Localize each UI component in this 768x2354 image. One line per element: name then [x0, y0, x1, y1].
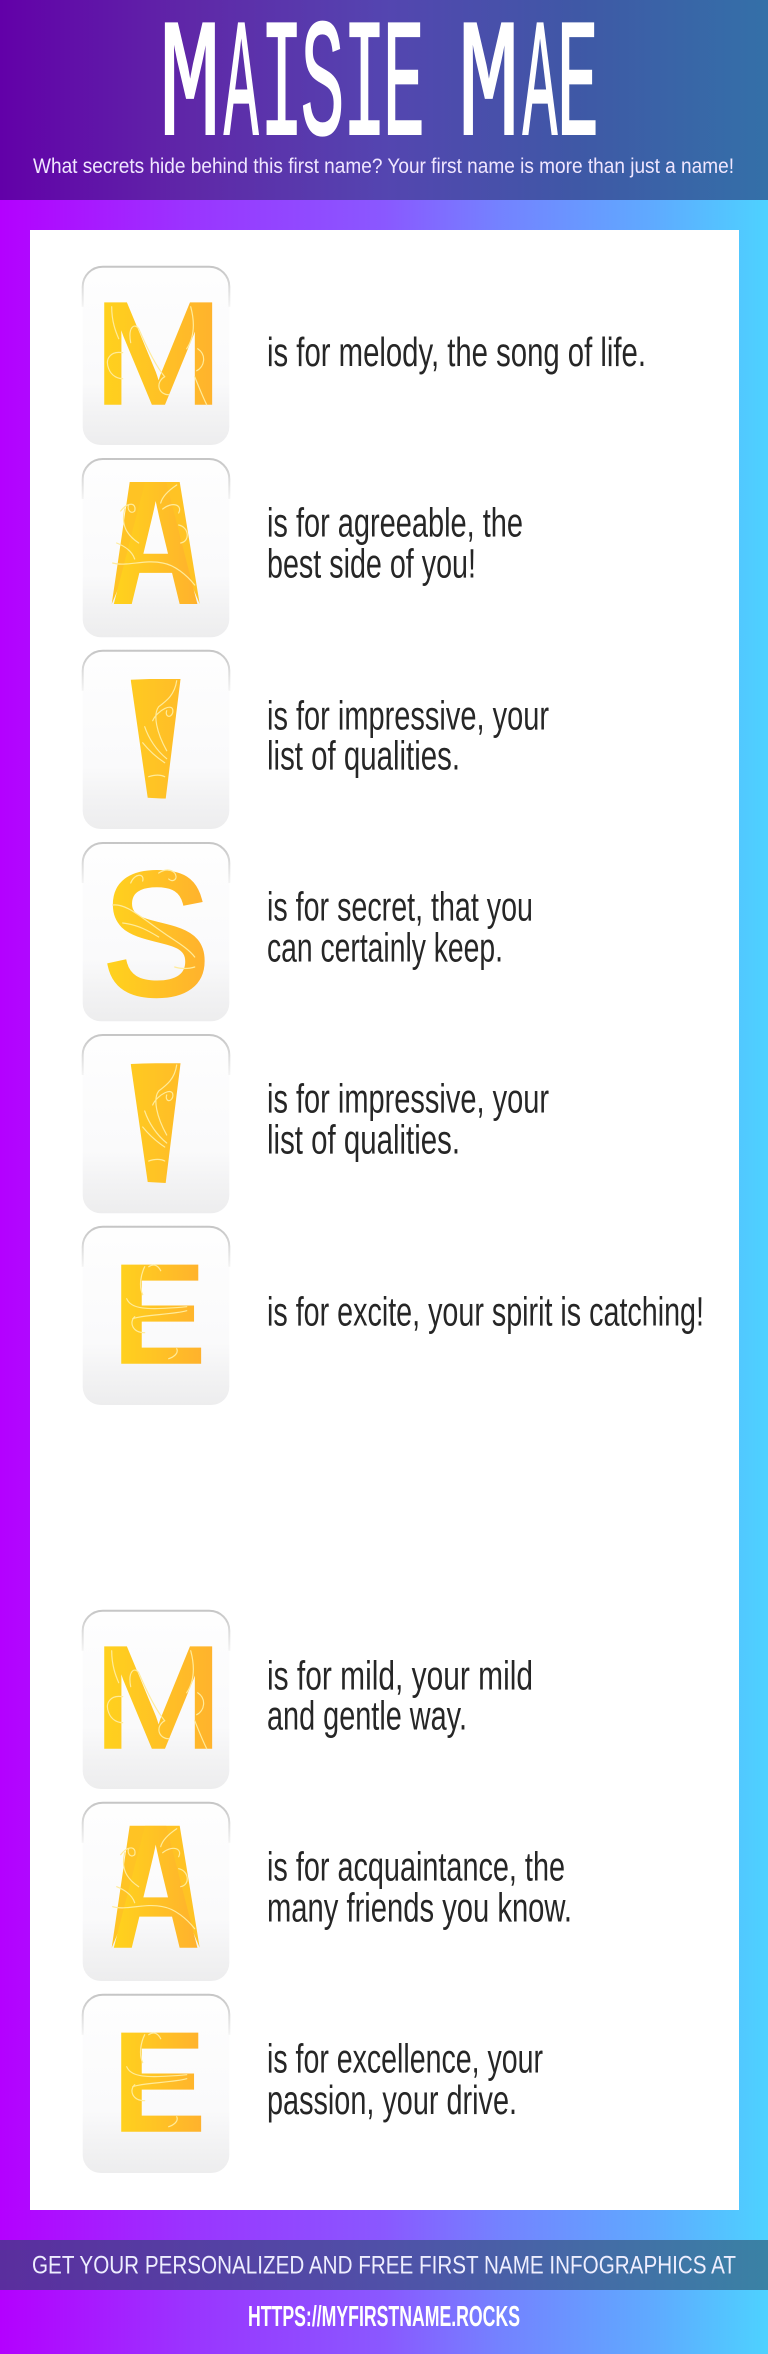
tile: letter A: A — [111, 444, 201, 642]
text — [267, 884, 533, 971]
text: is for impressive, your — [267, 1076, 549, 1122]
text: is for agreeable, the — [267, 500, 523, 546]
row: E is for excite — [83, 1227, 704, 1405]
row: A is for acquaintance — [83, 1788, 572, 1986]
tile: letter I — [83, 1025, 229, 1220]
text — [267, 1844, 572, 1931]
tile: letter A: A — [111, 1788, 201, 1986]
row: E is for excellence — [83, 1995, 543, 2173]
tile: letter E: E — [112, 2002, 207, 2163]
text — [267, 500, 523, 586]
white panel — [30, 230, 739, 2210]
footer band — [0, 2240, 768, 2290]
header band — [0, 0, 768, 200]
text: list of qualities. — [267, 1116, 460, 1162]
text: is for acquaintance, the — [267, 1844, 565, 1890]
tile: letter I: I — [95, 1025, 225, 1220]
text: list of qualities. — [267, 732, 460, 778]
text: is for secret, that you — [267, 884, 533, 930]
tile: letter S: S — [103, 836, 210, 1031]
tile: letter I: I — [95, 641, 225, 836]
text: is for excellence, your — [267, 2036, 543, 2082]
tile: letter E — [83, 1227, 229, 1405]
text: and gentle way. — [267, 1692, 467, 1738]
text: passion, your drive. — [267, 2077, 517, 2123]
row: M is for melody — [83, 267, 646, 445]
text — [267, 1652, 533, 1738]
tile: letter E — [83, 1995, 229, 2173]
row: I is for impressive (second) — [83, 1025, 549, 1220]
title — [159, 0, 727, 185]
text: is for mild, your mild — [267, 1652, 533, 1698]
text — [267, 1076, 549, 1162]
row: I is for impressive — [83, 641, 549, 836]
tile: letter E: E — [112, 1234, 207, 1395]
tile: letter M: M — [94, 1619, 223, 1778]
text: can certainly keep. — [267, 925, 503, 971]
text: best side of you! — [267, 540, 476, 586]
text: is for impressive, your — [267, 692, 549, 738]
footer url: HTTPS://MYFIRSTNAME.ROCKS — [248, 2301, 520, 2333]
text — [267, 2036, 543, 2123]
tile: letter M: M — [94, 275, 223, 434]
text — [267, 692, 549, 778]
row: A is for agreeable — [83, 444, 523, 642]
row: M is for mild — [83, 1611, 533, 1789]
row: S is for secret — [83, 836, 533, 1031]
tile: letter I — [83, 641, 229, 836]
text: many friends you know. — [267, 1885, 572, 1931]
